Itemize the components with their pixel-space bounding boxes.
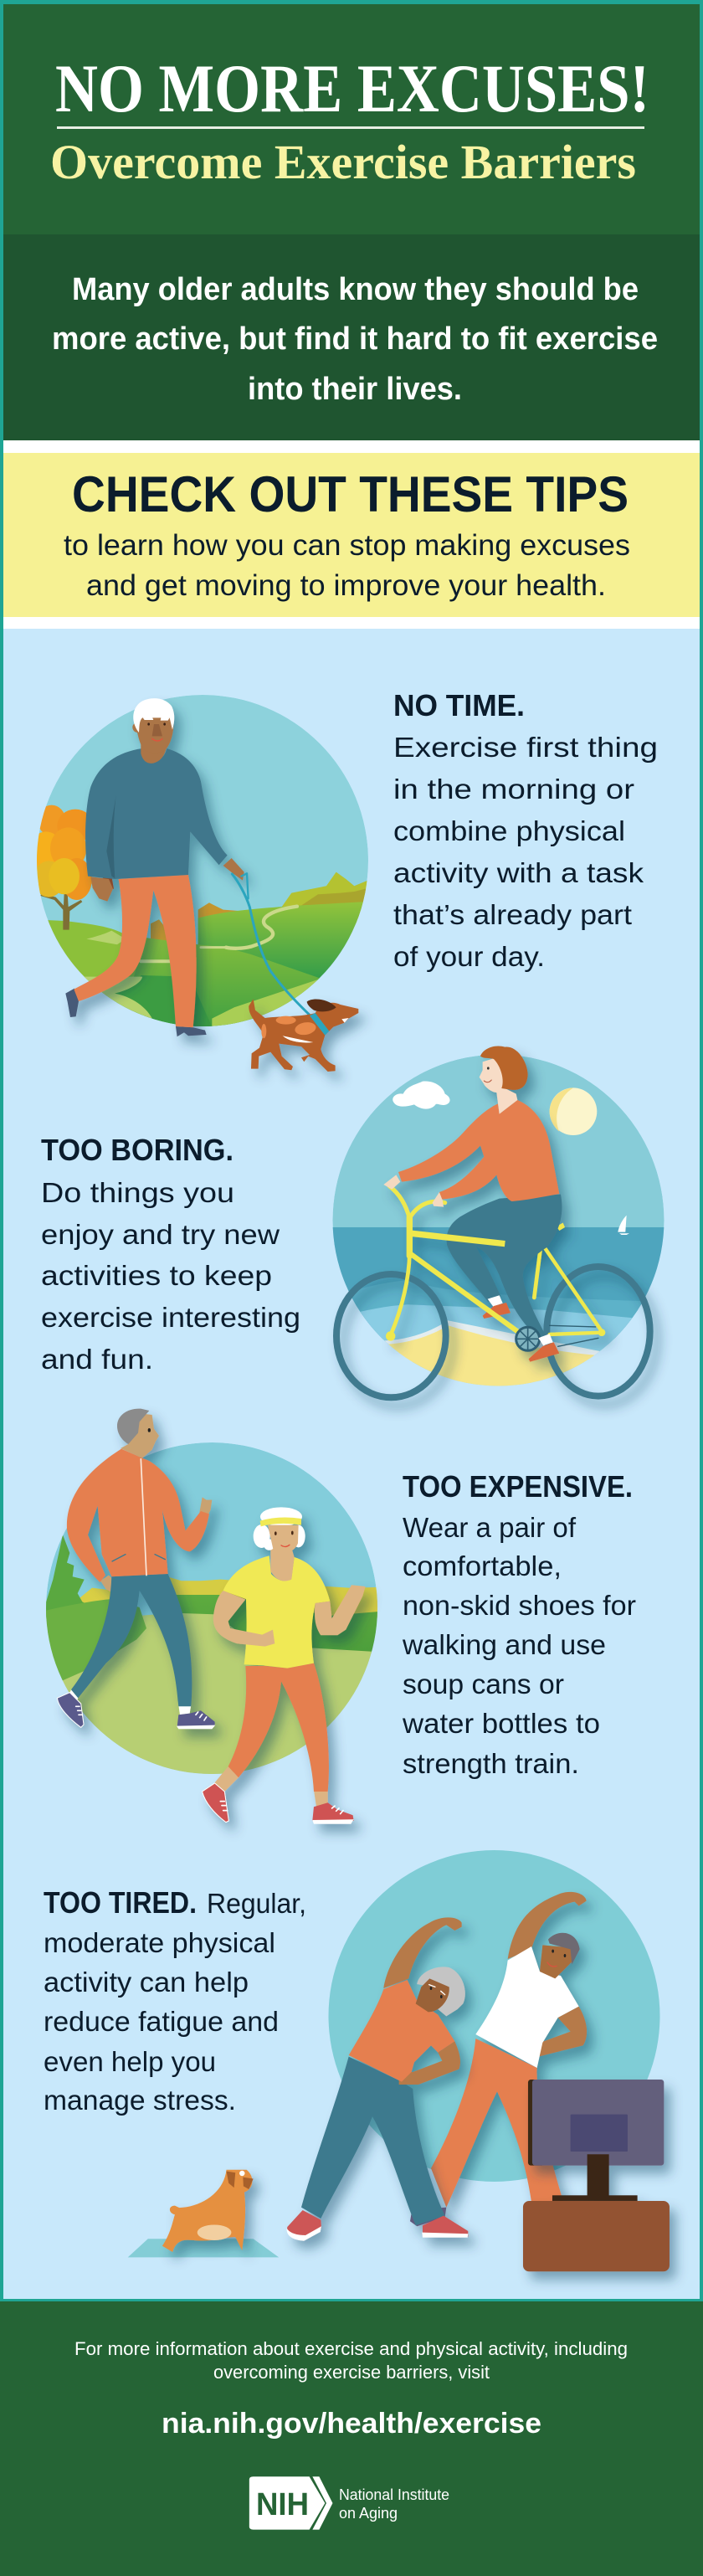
text: too tired: manage stress.: [44, 2085, 236, 2116]
panel: tips background: [3, 629, 700, 2299]
hands: [102, 875, 114, 890]
sun: [550, 1087, 597, 1135]
text: too tired: TOO TIRED.: [44, 1885, 197, 1920]
dog: [249, 999, 358, 1072]
panel: introduction: more active, but find it hard to fit exercise: [52, 321, 658, 357]
panel: introduction: into their lives.: [248, 372, 462, 407]
NIH logo: on Aging: [339, 2505, 398, 2522]
cabinet: [523, 2201, 670, 2271]
text: too tired: activity can help: [44, 1967, 249, 1998]
shoes: [57, 1693, 84, 1727]
text: no time: [393, 688, 658, 972]
more information text: For more information about exercise and physical activity, including: [74, 2338, 628, 2359]
text: too boring: [41, 1133, 300, 1375]
subtitle: Overcome Exercise Barriers: [50, 135, 636, 189]
bushes: [80, 1587, 110, 1602]
text: too expensive: water bottles to: [402, 1708, 600, 1739]
jacket: [67, 1449, 209, 1582]
text: too expensive: soup cans or: [403, 1668, 564, 1699]
website url: nia.nih.gov/health/exercise: [162, 2408, 541, 2440]
ground: [62, 1613, 372, 1774]
pants: [228, 1663, 329, 1792]
text: too boring: activities to keep: [41, 1260, 272, 1291]
text: too expensive: strength train.: [403, 1748, 579, 1779]
beach scene circle: [326, 1055, 670, 1401]
text: too boring: Do things you: [41, 1177, 234, 1208]
panel: title header: [3, 4, 700, 234]
text: too boring: enjoy and try new: [41, 1219, 280, 1250]
illustration: couple jogging: [42, 1409, 379, 1824]
panel: footer: [0, 2301, 703, 2576]
text: no time: activity with a task: [393, 857, 644, 888]
text: too expensive: TOO EXPENSIVE.: [403, 1469, 633, 1504]
sailboat: [618, 1216, 629, 1235]
head: [480, 1055, 517, 1114]
text: too boring: TOO BORING.: [41, 1133, 233, 1167]
text: too boring: exercise interesting: [41, 1302, 300, 1333]
tips subheading: and get moving to improve your health.: [86, 569, 606, 602]
text: no time: of your day.: [393, 941, 545, 972]
more information text: overcoming exercise barriers, visit: [213, 2362, 490, 2383]
calves: [214, 1766, 328, 1808]
frame: [389, 1186, 521, 1335]
text: too tired: reduce fatigue and: [44, 2006, 279, 2037]
television and cabinet: [523, 2080, 670, 2271]
bicycle wheels: [336, 1267, 650, 1397]
hands: [383, 1175, 444, 1207]
headband: [260, 1517, 301, 1526]
text: no time: that’s already part: [393, 899, 632, 930]
text: too tired: [44, 1885, 306, 2116]
text: no time: NO TIME.: [393, 688, 525, 722]
tips subheading: to learn how you can stop making excuses: [64, 529, 630, 562]
rear spokes: [550, 1325, 598, 1346]
sprocket: [516, 1327, 540, 1350]
NIH logo: [249, 2476, 449, 2530]
television screen: [528, 2080, 545, 2166]
text: no time: in the morning or: [393, 774, 634, 805]
jogging man: [57, 1409, 215, 1729]
illustration: woman cycling at the beach: [326, 1046, 670, 1401]
autumn tree: [37, 805, 92, 930]
feet: [488, 1295, 503, 1307]
sweater: [398, 1100, 559, 1201]
text: too tired: moderate physical: [44, 1927, 275, 1958]
park scene circle: [42, 1442, 379, 1789]
arms: [213, 1591, 275, 1647]
jogging woman: [203, 1507, 366, 1824]
face: [268, 1525, 299, 1553]
bicycle and rider: [336, 1046, 650, 1397]
mat: [128, 2239, 279, 2257]
shoes: [65, 989, 79, 1017]
NIH logo: NIH: [256, 2487, 309, 2522]
text: no time: Exercise first thing: [393, 732, 658, 763]
panel: introduction: [3, 234, 700, 440]
text: too boring: and fun.: [41, 1344, 153, 1375]
text: too tired: Regular,: [207, 1888, 306, 1919]
left hill: [46, 1599, 146, 1681]
hands: [100, 1497, 212, 1592]
tips heading: CHECK OUT THESE TIPS: [72, 466, 629, 522]
shoes: [203, 1783, 228, 1823]
stretching woman: [287, 1917, 468, 2241]
tips subheading: [64, 529, 630, 602]
more information text: [74, 2338, 628, 2383]
text: too expensive: Wear a pair of: [403, 1512, 577, 1543]
shirt: [223, 1555, 330, 1668]
text: too tired: even help you: [44, 2046, 216, 2077]
pine tree: [46, 1535, 85, 1621]
seat: [557, 1223, 565, 1231]
man: [65, 698, 244, 1036]
leash: [232, 873, 324, 1028]
green band: [173, 1595, 379, 1653]
panel: introduction: Many older adults know they should be: [72, 272, 639, 307]
back frame: [534, 1247, 603, 1334]
neck: [270, 1543, 295, 1581]
panel: check out these tips: [3, 453, 700, 617]
illustration: couple stretching with TV and dog: [128, 1850, 670, 2271]
yoga dog on mat: [128, 2170, 279, 2257]
head: [121, 1413, 159, 1458]
text: too expensive: comfortable,: [403, 1550, 562, 1581]
NIH logo: National Institute: [339, 2486, 449, 2503]
pants: [447, 1195, 562, 1338]
cloud: [393, 1081, 450, 1109]
text: too expensive: [402, 1469, 636, 1779]
socks: [69, 1689, 191, 1715]
pants: [71, 1574, 192, 1706]
text: no time: combine physical: [393, 815, 625, 846]
dog: [162, 2170, 254, 2252]
text: too expensive: non-skid shoes for: [403, 1590, 636, 1621]
hair: [254, 1507, 305, 1550]
teal circle: [328, 1850, 659, 2182]
park scene circle: [29, 695, 371, 1036]
sweater: [85, 748, 228, 879]
stretching man: [431, 1892, 587, 2208]
neck and head: [141, 739, 166, 764]
text: too expensive: walking and use: [402, 1629, 606, 1660]
pants: [74, 875, 197, 1027]
illustration: man walking dog: [29, 695, 371, 1072]
